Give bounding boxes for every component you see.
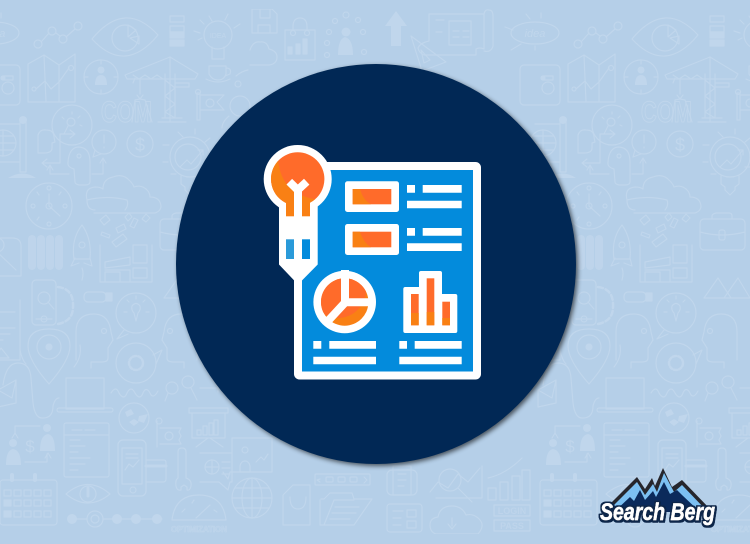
caption lines under bar chart [399,341,462,364]
logo wordmark: Search Berg [600,499,715,526]
report page [298,166,477,376]
pie chart [313,270,376,334]
navy circle badge [176,64,578,466]
block: second text row [345,224,462,255]
block: first text row [345,181,462,212]
caption lines under pie chart [313,341,376,364]
bar chart [403,271,457,333]
icon: report sheet with light bulb pen [264,145,477,376]
logo: Search Berg [600,468,715,526]
logo mountains [604,468,711,512]
icon: light bulb pen [264,145,332,284]
